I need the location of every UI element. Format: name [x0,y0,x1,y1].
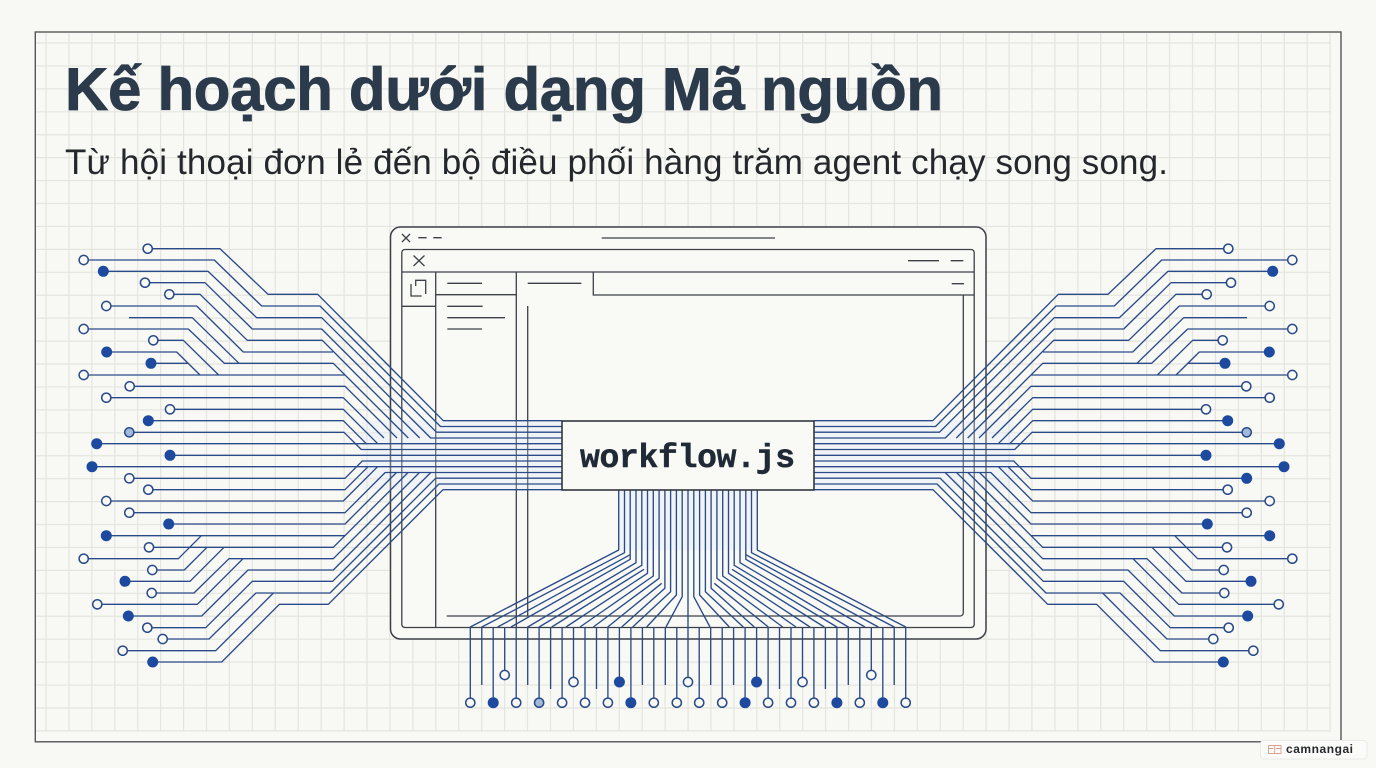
icon: open book [1268,746,1281,754]
title: Kế hoạch dưới dạng Mã nguồn [65,56,943,123]
brand name: camnangai [1286,742,1353,756]
watermark badge [1260,740,1367,759]
application window [390,227,986,639]
icon: copy pages [411,280,426,296]
right circuit traces [814,249,1292,662]
bottom circuit traces [470,490,906,702]
left circuit traces [84,249,562,662]
left endpoint nodes [79,244,175,667]
right endpoint nodes [1201,244,1297,667]
file name: workflow.js [580,440,795,477]
bottom endpoint nodes [466,670,910,708]
central file box [562,421,814,490]
subtitle: Từ hội thoại đơn lẻ đến bộ điều phối hàng trăm agent chạy song song. [65,143,1168,182]
